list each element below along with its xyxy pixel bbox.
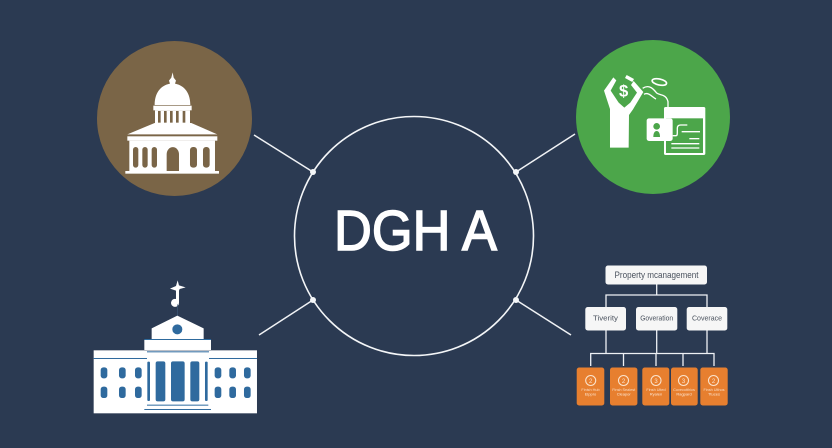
box: Tiverity: Tiverity <box>593 314 618 322</box>
orange card 3: 3 <box>654 379 658 385</box>
orange card 5: 2 <box>712 379 716 385</box>
orange card 4: Ragpard <box>676 392 692 396</box>
columns <box>144 361 211 410</box>
org chart: property management <box>577 266 728 406</box>
orange card 4 <box>671 368 698 406</box>
figure with raised arms <box>604 77 643 148</box>
top box <box>606 266 707 284</box>
orange card 1: Finish Hub <box>581 388 600 392</box>
orange card 5 <box>700 368 728 406</box>
document <box>664 107 705 155</box>
id badge <box>647 118 673 141</box>
title: DGH A <box>334 199 497 263</box>
box: Coverace: Coverace <box>692 314 722 322</box>
box: Tiverity <box>585 307 626 330</box>
orange card 3: Ryalen <box>650 392 662 396</box>
orange card 3: Finsh Ulted <box>646 388 666 392</box>
box: Coverace <box>687 307 727 330</box>
orange card 2: Finsh Sealest <box>612 388 636 392</box>
orange card 2: 2 <box>622 379 626 385</box>
orange card 3 <box>642 368 669 406</box>
icon: music note star <box>170 280 186 307</box>
orange card 1: Elppro <box>585 392 597 396</box>
orange card 4: 3 <box>682 379 686 385</box>
icon: finance and identity document in green circle <box>576 40 730 194</box>
orange card 1 <box>577 368 604 406</box>
orange card 2 <box>610 368 637 406</box>
orange card 5: Finsh Ulthos <box>703 388 725 392</box>
central hub circle with title <box>294 116 534 356</box>
connector lines and nodes <box>254 134 575 335</box>
orange card 1: 2 <box>589 379 593 385</box>
box: Goveration <box>636 307 677 330</box>
icon: domed capitol in brown circle <box>97 41 252 196</box>
wings <box>94 350 257 413</box>
pediment <box>152 316 204 339</box>
icon: government building with music note <box>94 280 257 413</box>
top box: Property mcanagement <box>614 270 699 280</box>
orange card 2: Cleapor <box>617 392 631 396</box>
orange card 5: Ttuces <box>708 392 720 396</box>
box: Goveration: Goveration <box>640 314 673 322</box>
money bag strand <box>643 87 668 108</box>
dollar sign: $ <box>619 81 629 100</box>
windows <box>101 367 251 398</box>
orange card 4: Covecotthics <box>673 388 695 392</box>
